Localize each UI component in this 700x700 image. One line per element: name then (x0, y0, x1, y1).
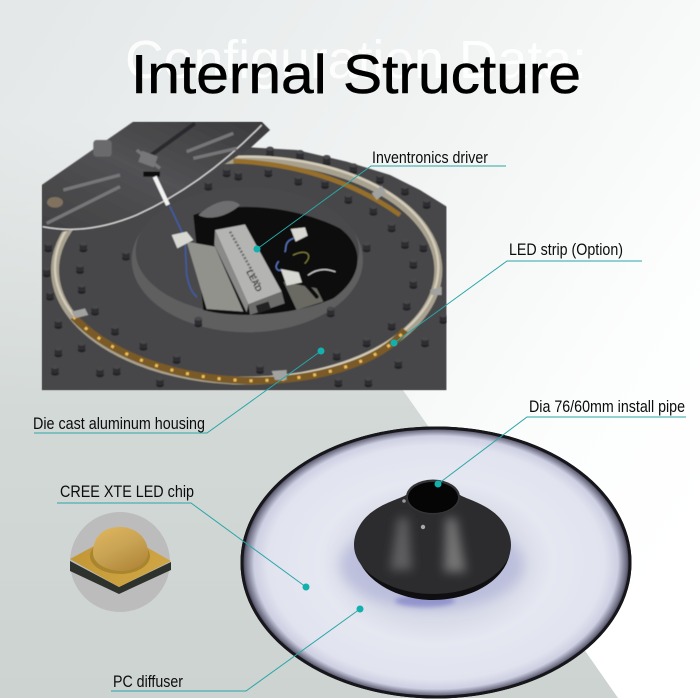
LED driver box (214, 224, 285, 315)
disc rim (242, 428, 630, 697)
chip plate (70, 532, 171, 587)
callout: LED strip (390, 241, 642, 346)
callout: CREE chip: CREE XTE LED chip (60, 483, 194, 501)
chip dome base (90, 538, 150, 574)
callout: install pipe (434, 398, 686, 488)
chip side (70, 561, 171, 594)
strip clips (72, 186, 442, 380)
cone shadow (395, 595, 455, 607)
callout: Inventronics driver (254, 149, 506, 252)
callout: CREE chip (57, 483, 310, 590)
open lid (42, 122, 270, 232)
wire connectors (172, 227, 308, 286)
callout: Die cast housing: Die cast aluminum housing (33, 415, 205, 433)
cone glow (340, 520, 524, 610)
mounting pegs (43, 147, 447, 387)
housing plate (42, 147, 447, 390)
title: Internal Structure (131, 43, 581, 105)
chip dome (93, 527, 148, 571)
mounting cone (354, 480, 511, 600)
panel: PC diffuser lamp (240, 426, 632, 698)
panel: LED chip (70, 512, 171, 612)
LED driver box: LEAD (244, 268, 264, 293)
callout: LED strip: LED strip (Option) (509, 241, 623, 259)
wiring (170, 207, 335, 297)
callout: Inventronics driver: Inventronics driver (372, 149, 488, 167)
callout: Die cast housing (33, 348, 324, 433)
callout: PC diffuser (111, 606, 364, 691)
callout: PC diffuser: PC diffuser (113, 673, 183, 691)
ghost heading: Configuration Data: (125, 30, 587, 90)
panel: housing photo (42, 122, 447, 390)
chip backdrop circle (70, 512, 170, 612)
diffuser disc (240, 426, 632, 698)
central well (122, 188, 371, 332)
LED strip ring (55, 157, 438, 381)
